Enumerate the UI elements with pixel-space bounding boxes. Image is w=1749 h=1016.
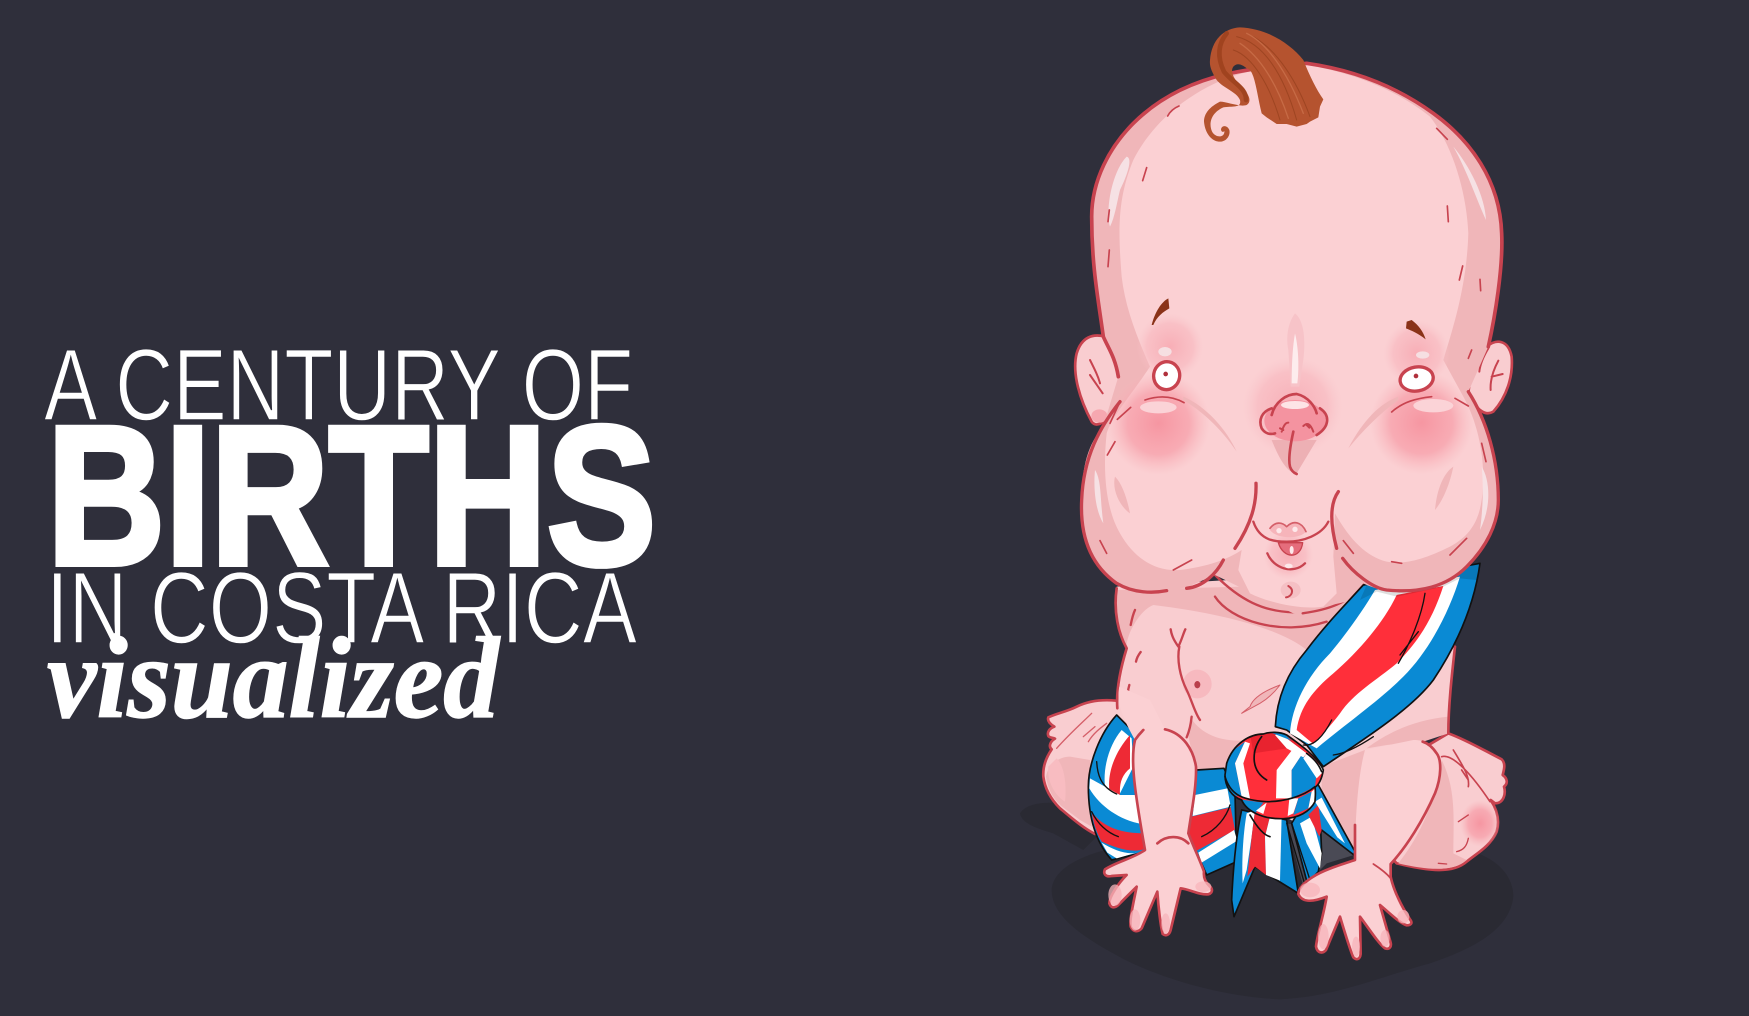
- nose: [1260, 313, 1327, 474]
- secondary shadow: [1020, 803, 1097, 850]
- left cheek outline: [1081, 402, 1256, 592]
- torso: [1116, 567, 1455, 853]
- title block: [44, 328, 656, 743]
- ear: right: [1468, 342, 1512, 413]
- right arm outline: [1298, 742, 1440, 959]
- light face area: [1105, 65, 1483, 608]
- eye: right: [1398, 364, 1435, 394]
- eyebrow: right: [1406, 320, 1426, 339]
- left arm and hand: [1104, 687, 1212, 935]
- mouth and chin: [1253, 522, 1328, 598]
- sash knot: [1220, 730, 1327, 837]
- eyebrow: left: [1152, 298, 1169, 325]
- right ribbon wing: [1292, 785, 1355, 883]
- right arm and hand fill: [1298, 740, 1440, 959]
- eye: left: [1151, 360, 1182, 392]
- hair tuft: [1204, 27, 1323, 142]
- nipple: [1183, 670, 1212, 698]
- lower body parts: [1020, 563, 1513, 999]
- head and cheeks: [1081, 63, 1502, 613]
- sash wrap: left side: [1088, 715, 1153, 860]
- baby illustration: [1020, 27, 1513, 999]
- back left leg and foot: [1043, 700, 1133, 834]
- title line: visualized: visualized: [47, 615, 501, 743]
- back right leg and foot: [1370, 733, 1507, 870]
- dark underside of ribbon: [1287, 823, 1354, 887]
- right cheek outline: [1332, 392, 1498, 591]
- sash wrap: middle: [1188, 768, 1237, 875]
- head outline: [1092, 63, 1502, 377]
- skin wrinkles: [1100, 106, 1486, 570]
- chest creases: [1128, 575, 1363, 737]
- ground shadow: [1052, 847, 1513, 999]
- cheek blush: [1107, 313, 1473, 513]
- forehead highlights: [1094, 147, 1488, 530]
- title line: A CENTURY OF: A CENTURY OF: [44, 328, 633, 442]
- title line: IN COSTA RICA: IN COSTA RICA: [46, 551, 637, 665]
- hand fingertip shading: [1108, 881, 1409, 957]
- title line: BIRTHS: BIRTHS: [47, 385, 656, 606]
- head shadow silhouette: [1081, 63, 1502, 613]
- left arm outline: [1104, 729, 1212, 935]
- sash across chest: [1275, 563, 1480, 767]
- ear: left: [1075, 336, 1120, 424]
- left ribbon tail: [1232, 810, 1298, 917]
- sash tails: [1232, 785, 1355, 917]
